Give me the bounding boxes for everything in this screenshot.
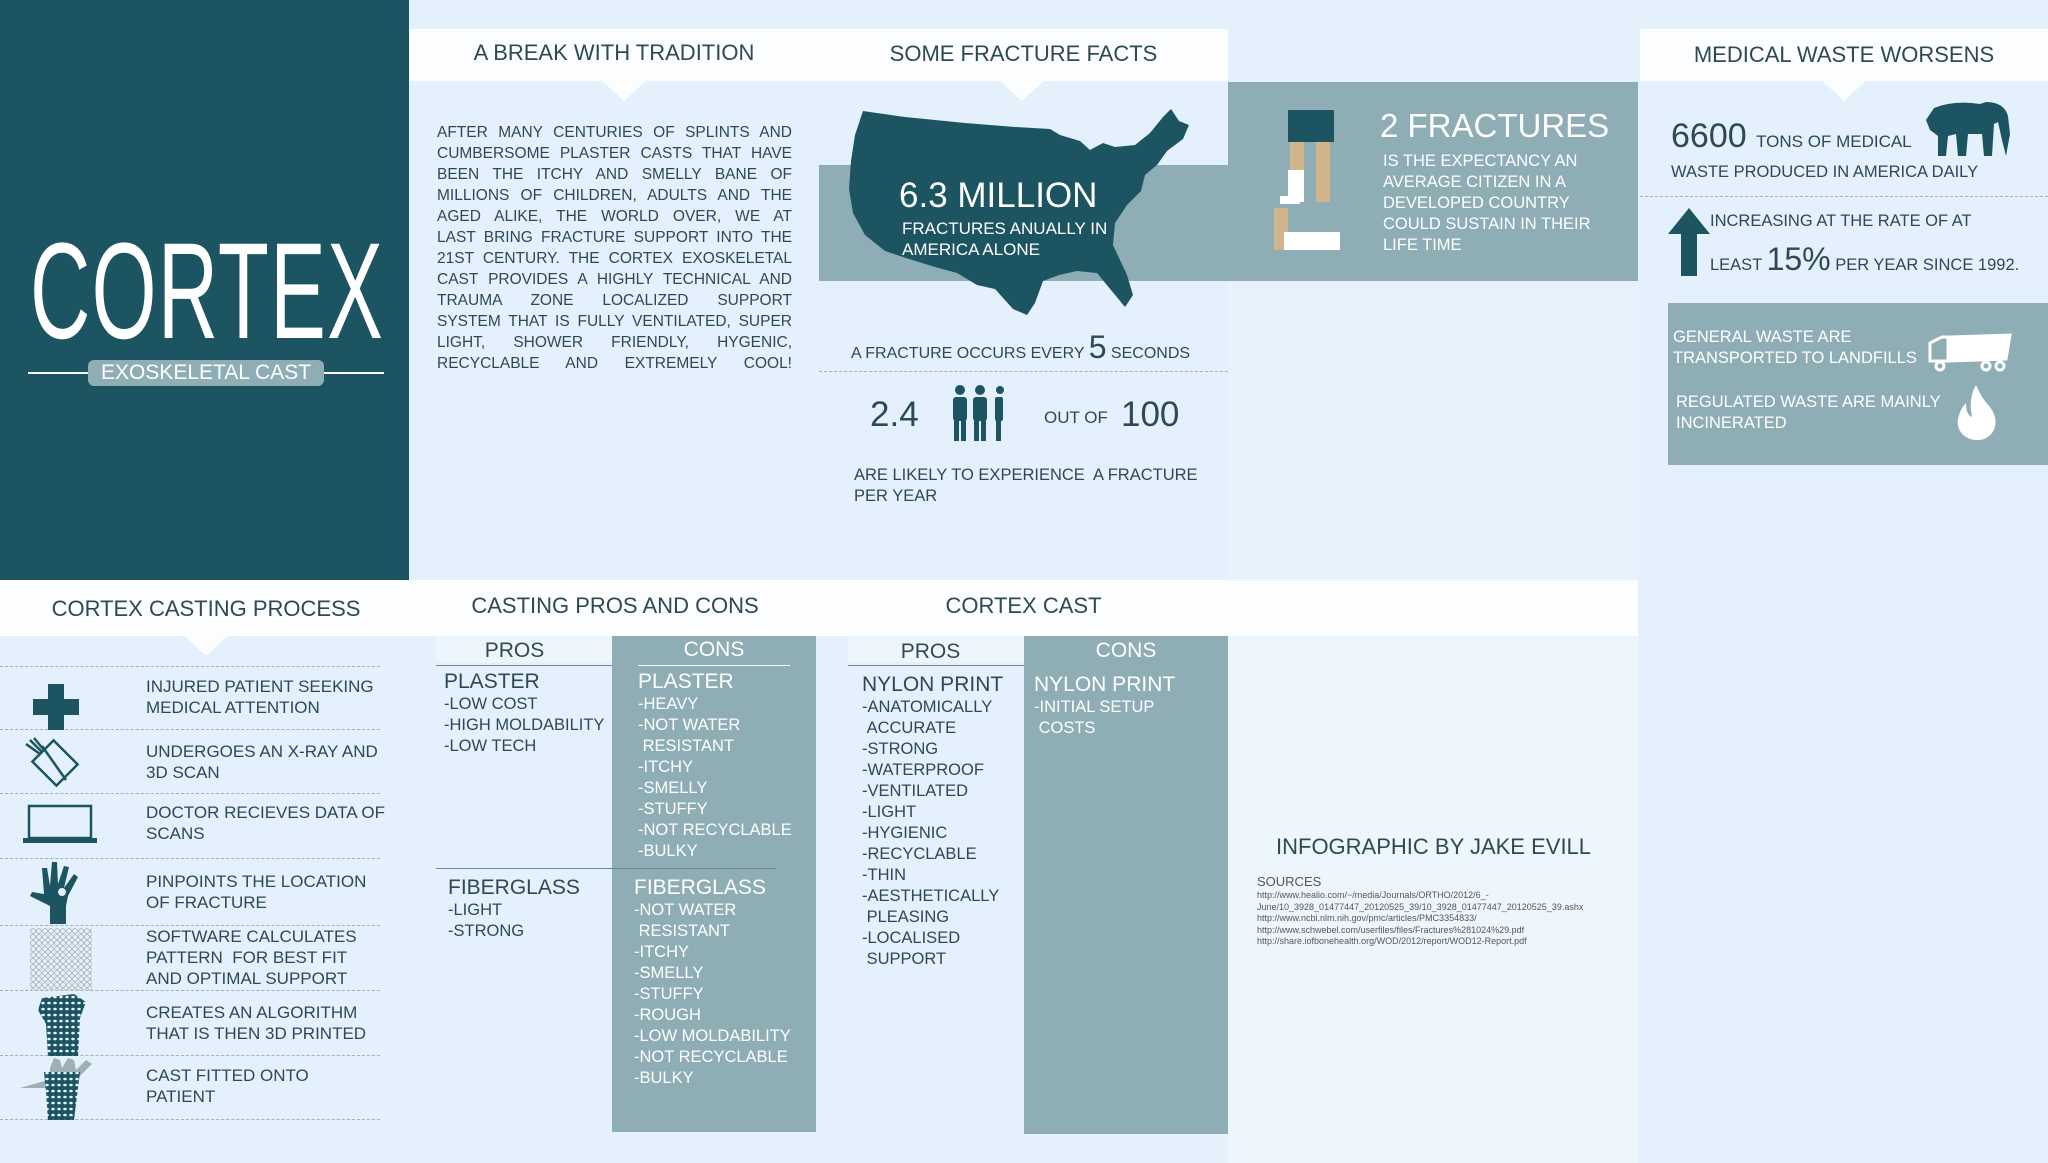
text: likely per year: ARE LIKELY TO EXPERIENCE A FRACTURE xyxy=(854,466,1198,484)
text block: intro paragraph: CUMBERSOME PLASTER CASTS THAT HAVE xyxy=(437,145,792,162)
text block: intro paragraph: AFTER MANY CENTURIES OF SPLINTS AND xyxy=(437,124,792,141)
cons: plaster: -NOT RECYCLABLE xyxy=(638,821,792,839)
stat: 6600 tons: 6600 TONS OF MEDICAL xyxy=(1671,117,1912,155)
icon: printed cast xyxy=(38,994,86,1056)
pros: nylon: SUPPORT xyxy=(867,950,946,968)
text: 6.3 MILLION xyxy=(899,176,1097,215)
panel: title xyxy=(0,0,409,580)
cons: plaster: -HEAVY xyxy=(638,695,698,713)
stat: 2.4 out of 100: 100 xyxy=(1121,395,1179,434)
panel: 2 fractures: IS THE EXPECTANCY AN xyxy=(1383,152,1577,170)
lighter area bottom right xyxy=(1228,636,1638,1163)
icon: pattern xyxy=(30,928,92,990)
panel: process list xyxy=(0,666,385,1120)
cons: fiberglass: -SMELLY xyxy=(634,964,703,982)
text: http://www.healio.com/~/media/Journals/ORTHO/2012/6_- xyxy=(1257,890,1489,900)
cons: fiberglass: RESISTANT xyxy=(639,922,730,940)
pros: fiberglass xyxy=(448,876,580,940)
cons: fiberglass: FIBERGLASS xyxy=(634,876,766,899)
panel: waste disposal: REGULATED WASTE ARE MAINLY xyxy=(1676,393,1941,411)
text: likely per year xyxy=(854,466,1198,505)
panel: 2 fractures: AVERAGE CITIZEN IN A xyxy=(1383,173,1566,191)
stat: 2.4 out of 100 xyxy=(870,385,1179,441)
cons: fiberglass: -NOT RECYCLABLE xyxy=(634,1048,788,1066)
pros: fiberglass: -STRONG xyxy=(448,922,524,940)
icon: elephant xyxy=(1926,102,2010,156)
pros: nylon: -AESTHETICALLY xyxy=(862,887,999,905)
panel: casting pros and cons xyxy=(436,636,816,1132)
pros: plaster: -LOW COST xyxy=(444,695,538,713)
cons: plaster: -BULKY xyxy=(638,842,698,860)
cons: plaster: -SMELLY xyxy=(638,779,707,797)
panel: 2 fractures: 2 FRACTURES xyxy=(1380,107,1609,144)
stat: 2.4 out of 100: 2.4 xyxy=(870,395,919,434)
text block: intro paragraph: RECYCLABLE AND EXTREMELY COOL! xyxy=(437,355,792,372)
text: wrist xyxy=(1256,341,1549,383)
icon: legs xyxy=(1274,110,1340,250)
pros: nylon xyxy=(862,673,1003,968)
cons: nylon: NYLON PRINT xyxy=(1034,673,1175,696)
panel: process list: PINPOINTS THE LOCATION xyxy=(146,872,366,891)
gray band behind map xyxy=(819,165,1228,281)
icon: x-ray xyxy=(25,737,80,788)
panel: waste disposal xyxy=(1668,303,2048,465)
text: MEDICAL WASTE WORSENS xyxy=(1694,42,1994,67)
pros: nylon: -THIN xyxy=(862,866,906,884)
panel: process list: PATTERN FOR BEST FIT xyxy=(146,948,347,967)
panel: 2 fractures: DEVELOPED COUNTRY xyxy=(1383,194,1570,212)
text: http://share.iofbonehealth.org/WOD/2012/report/WOD12-Report.pdf xyxy=(1257,936,1527,946)
text block: intro paragraph xyxy=(437,124,792,372)
cons: plaster: RESISTANT xyxy=(643,737,734,755)
heading: casting process: CORTEX CASTING PROCESS xyxy=(52,596,360,621)
panel: process list: SCANS xyxy=(146,824,205,843)
map: USA xyxy=(849,109,1189,315)
panel: casting pros and cons: CONS xyxy=(684,638,744,661)
pros: nylon: -HYGIENIC xyxy=(862,824,947,842)
icon: hand xyxy=(1530,302,1610,394)
panel: waste disposal: GENERAL WASTE ARE xyxy=(1673,328,1852,346)
panel: process list: INJURED PATIENT SEEKING xyxy=(146,677,374,696)
pros: plaster: PLASTER xyxy=(444,670,540,693)
stat: 6.3 million xyxy=(899,176,1107,259)
stat: 2.4 out of 100: OUT OF xyxy=(1044,408,1108,427)
subtitle badge: EXOSKELETAL CAST xyxy=(101,361,311,384)
text block: intro paragraph: LIGHT, SHOWER FRIENDLY, HYGENIC, xyxy=(437,334,792,351)
cons: fiberglass xyxy=(634,876,791,1087)
heading: break with tradition: A BREAK WITH TRADITION xyxy=(474,40,754,65)
title: CORTEX xyxy=(30,215,384,368)
panel: casting pros and cons: PROS xyxy=(485,639,544,662)
cons: fiberglass: -BULKY xyxy=(634,1069,694,1087)
text block: intro paragraph: LAST BRING FRACTURE SUPPORT INTO THE xyxy=(437,229,792,246)
cons: fiberglass: -ROUGH xyxy=(634,1006,701,1024)
heading: fracture facts: SOME FRACTURE FACTS xyxy=(890,41,1157,66)
panel: process list: MEDICAL ATTENTION xyxy=(146,698,320,717)
pros: plaster: -HIGH MOLDABILITY xyxy=(444,716,604,734)
icon: up arrow xyxy=(1668,208,1710,276)
panel: process list: 3D SCAN xyxy=(146,763,220,782)
panel: 2 fractures: LIFE TIME xyxy=(1383,236,1462,254)
text: June/10_3928_01477447_20120525_39/10_3928_01477447_20120525_39.ashx xyxy=(1257,902,1583,912)
pros: nylon: -RECYCLABLE xyxy=(862,845,977,863)
panel: process list: PATIENT xyxy=(146,1087,215,1106)
panel: 2 fractures: COULD SUSTAIN IN THEIR xyxy=(1383,215,1590,233)
panel: process list: DOCTOR RECIEVES DATA OF xyxy=(146,803,385,822)
top header strip xyxy=(409,29,1228,81)
pros: nylon: ACCURATE xyxy=(867,719,956,737)
icon: hand with dot xyxy=(30,862,78,924)
panel: cortex cast pros and cons: CONS xyxy=(1096,639,1156,662)
pros: nylon: -LOCALISED xyxy=(862,929,960,947)
panel: process list: OF FRACTURE xyxy=(146,893,267,912)
text block: intro paragraph: SYSTEM THAT IS FULLY VENTILATED, SUPER xyxy=(437,313,792,330)
panel: process list: THAT IS THEN 3D PRINTED xyxy=(146,1024,366,1043)
cons: fiberglass: -ITCHY xyxy=(634,943,689,961)
text: likely per year: PER YEAR xyxy=(854,487,937,505)
panel: cortex cast pros and cons xyxy=(848,636,1228,1134)
pros: plaster: -LOW TECH xyxy=(444,737,536,755)
cons: plaster xyxy=(638,670,792,860)
icon: cast on hand xyxy=(20,1058,92,1120)
pros: nylon: -ANATOMICALLY xyxy=(862,698,992,716)
stat: 15%: INCREASING AT THE RATE OF AT xyxy=(1710,212,1972,230)
cons: plaster: -STUFFY xyxy=(638,800,708,818)
text: http://www.schwebel.com/userfiles/files/Fractures%281024%29.pdf xyxy=(1257,924,1524,934)
text: wrist: FRACTURE LOCATION IS THE WRIST xyxy=(1256,363,1549,381)
cons: fiberglass: -NOT WATER xyxy=(634,901,736,919)
header: medical waste xyxy=(1640,29,2048,81)
text block: intro paragraph: CAST PROVIDES A HIGHLY TECHNICAL AND xyxy=(437,271,792,288)
text: FRACTURES ANUALLY IN xyxy=(902,219,1107,238)
panel: cortex cast pros and cons: PROS xyxy=(901,640,960,663)
panel: process list: UNDERGOES AN X-RAY AND xyxy=(146,742,378,761)
pros: nylon: PLEASING xyxy=(867,908,949,926)
pros: nylon: -VENTILATED xyxy=(862,782,968,800)
text: AMERICA ALONE xyxy=(902,240,1040,259)
heading: cortex cast: CORTEX CAST xyxy=(945,593,1102,618)
cons column xyxy=(612,636,816,1132)
text: http://www.ncbi.nlm.nih.gov/pmc/articles/PMC3354833/ xyxy=(1257,913,1477,923)
panel: waste disposal: INCINERATED xyxy=(1676,414,1787,432)
pros: nylon: -LIGHT xyxy=(862,803,916,821)
pros: nylon: -STRONG xyxy=(862,740,938,758)
credits: INFOGRAPHIC BY JAKE EVILL xyxy=(1276,834,1591,859)
panel: process list: SOFTWARE CALCULATES xyxy=(146,927,357,946)
stat: 15% xyxy=(1710,212,2019,277)
icon: flame xyxy=(1958,385,1996,440)
panel: 2 fractures xyxy=(1228,82,1638,281)
bottom header strip xyxy=(0,580,1638,636)
pros: fiberglass: FIBERGLASS xyxy=(448,876,580,899)
cons: nylon xyxy=(1034,673,1175,737)
cons: fiberglass: -STUFFY xyxy=(634,985,704,1003)
text: wrist: THE MOST COMMON xyxy=(1256,342,1423,360)
pros: nylon: -WATERPROOF xyxy=(862,761,984,779)
cons: plaster: -NOT WATER xyxy=(638,716,740,734)
text block: intro paragraph: TRAUMA ZONE LOCALIZED SUPPORT xyxy=(437,292,792,309)
text block: intro paragraph: MILLIONS OF CHILDREN, ADULTS AND THE xyxy=(437,187,792,204)
text block: intro paragraph: 21ST CENTURY. THE CORTEX EXOSKELETAL xyxy=(437,250,792,267)
cons: nylon: -INITIAL SETUP xyxy=(1034,698,1154,716)
stat: 15%: LEAST 15% PER YEAR SINCE 1992. xyxy=(1710,241,2019,277)
icon: truck xyxy=(1928,334,2012,372)
stat: 6600 tons xyxy=(1671,117,1978,181)
pros: nylon: NYLON PRINT xyxy=(862,673,1003,696)
panel: process list: CREATES AN ALGORITHM xyxy=(146,1003,357,1022)
cons: fiberglass: -LOW MOLDABILITY xyxy=(634,1027,791,1045)
cons: plaster: PLASTER xyxy=(638,670,734,693)
text block: intro paragraph: AGED ALIKE, THE WORLD OVER, WE AT xyxy=(437,208,792,225)
panel: process list: CAST FITTED ONTO xyxy=(146,1066,309,1085)
stat: every 5 seconds: A FRACTURE OCCURS EVERY 5 SECONDS xyxy=(851,329,1190,365)
pros: plaster xyxy=(444,670,604,755)
pros: fiberglass: -LIGHT xyxy=(448,901,502,919)
panel: process list: AND OPTIMAL SUPPORT xyxy=(146,969,347,988)
icon: people xyxy=(953,385,1004,441)
icon: cross xyxy=(33,684,79,730)
stat: 6600 tons: WASTE PRODUCED IN AMERICA DAILY xyxy=(1671,163,1978,181)
icon: laptop xyxy=(23,804,97,843)
text block: intro paragraph: BEEN THE ITCHY AND SMELLY BANE OF xyxy=(437,166,792,183)
cons: plaster: -ITCHY xyxy=(638,758,693,776)
cons: nylon: COSTS xyxy=(1039,719,1095,737)
sources: SOURCES xyxy=(1257,874,1321,889)
heading: casting pros and cons: CASTING PROS AND CONS xyxy=(471,593,759,618)
panel: waste disposal: TRANSPORTED TO LANDFILLS xyxy=(1673,349,1917,367)
